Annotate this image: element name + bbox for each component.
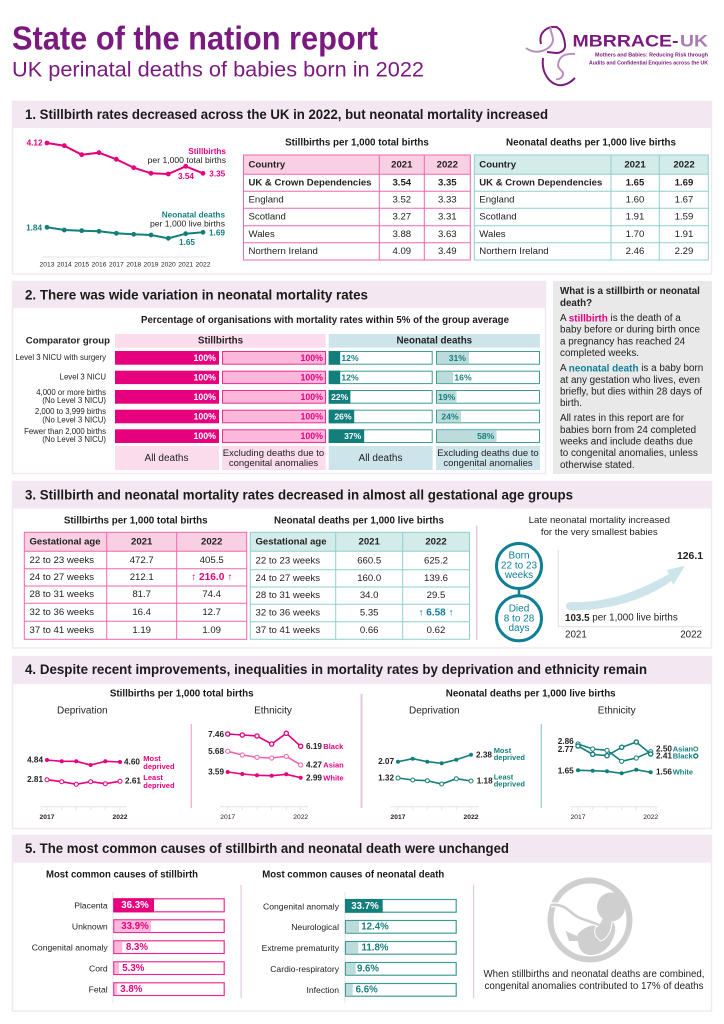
table: stillbirths by gestational age: 2022: [201, 536, 222, 548]
bar chart: causes of neonatal death: Congenital anomaly: [263, 902, 340, 912]
bar chart: stillbirths: 100%: [194, 353, 216, 363]
line chart: stillbirths by ethnicity: Ethnicity: [254, 706, 292, 716]
line chart: UK rates 2013 to 2022: 2020: [161, 262, 176, 268]
table: neonatal deaths by country: 2021: [624, 160, 646, 170]
bar chart: causes of neonatal death: 9.6%: [357, 964, 379, 974]
table: neonatal deaths by gestational age: 625.2: [424, 556, 448, 566]
line chart: neonatal deaths by deprivation: Least: [494, 772, 514, 782]
bar chart: neonatal deaths: 31%: [449, 353, 466, 363]
table: stillbirths by country: 3.27: [392, 212, 411, 222]
bar chart: causes of neonatal death: Infection: [306, 985, 339, 995]
subheading: neonatal deaths: Neonatal deaths per 1,000 live births: [446, 688, 616, 700]
table: neonatal deaths by gestational age: 24 to 27 weeks: [256, 573, 320, 584]
line chart: neonatal deaths by ethnicity: Asian: [673, 744, 694, 754]
line chart: neonatal deaths by deprivation: Most: [494, 746, 512, 755]
bar chart: stillbirths: congenital anomalies: [229, 458, 318, 469]
line chart: neonatal deaths by deprivation: 2022: [464, 814, 479, 821]
bar chart: causes of stillbirth: 8.3%: [126, 942, 148, 953]
row labels: comparator group: Level 3 NICU: [60, 372, 106, 382]
callout: late neonatal mortality: 103.5 per 1,000 live births: [565, 612, 678, 624]
callout: late neonatal mortality: 8 to 28: [504, 614, 535, 624]
callout: late neonatal mortality: days: [508, 623, 530, 634]
table: neonatal deaths by country: 1.67: [675, 194, 693, 206]
line chart: neonatal deaths by deprivation: deprived: [494, 780, 525, 788]
table: stillbirths by gestational age: 212.1: [130, 572, 154, 583]
bar chart: causes of neonatal death: Most common causes of neonatal death: [262, 870, 444, 880]
bar chart: neonatal deaths: 58%: [477, 431, 495, 441]
table: neonatal deaths by country: 2022: [673, 160, 695, 170]
table: stillbirths by gestational age: ↑ 216.0 ↑: [191, 572, 232, 583]
line chart: UK rates 2013 to 2022: per 1,000 total births: [148, 155, 226, 165]
line chart: neonatal deaths by deprivation: 1.18: [477, 776, 493, 786]
table heading: neonatal deaths by country: Neonatal deaths per 1,000 live births: [506, 138, 676, 148]
title: UK perinatal deaths of babies born in 2022: [12, 58, 424, 82]
line chart: stillbirths by ethnicity: 4.27: [306, 760, 322, 770]
bar chart: neonatal deaths: 26%: [334, 412, 352, 422]
table: stillbirths by gestational age: 22 to 23 weeks: [30, 555, 94, 566]
bar chart: causes of stillbirth: 36.3%: [121, 900, 149, 911]
subheading: stillbirths: Stillbirths per 1,000 total births: [110, 688, 254, 700]
panel: section 4: [12, 656, 712, 828]
table: neonatal deaths by gestational age: Gestational age: [256, 536, 326, 548]
line chart: stillbirths by deprivation: deprived: [143, 762, 175, 771]
line chart: UK rates 2013 to 2022: 2018: [126, 262, 141, 268]
logo: MBRRACE-UK: MBRRACE-: [572, 33, 678, 51]
table: stillbirths by gestational age: 37 to 41 weeks: [30, 625, 94, 636]
table: stillbirths by gestational age: 32 to 36 weeks: [30, 607, 94, 618]
table: stillbirths by country: UK & Crown Dependencies: [248, 178, 372, 188]
table: stillbirths by country: 2021: [391, 160, 413, 170]
bar chart: causes of stillbirth: [32, 870, 224, 1003]
line chart: stillbirths by deprivation: Deprivation: [57, 706, 108, 716]
callout: late neonatal mortality: Late neonatal mortality increased: [529, 515, 670, 526]
line chart: UK rates 2013 to 2022: 2022: [196, 262, 211, 268]
line chart: UK rates 2013 to 2022: 1.65: [179, 238, 195, 247]
bar chart: causes of stillbirth: 33.9%: [121, 921, 149, 932]
table: stillbirths by country: Scotland: [248, 212, 286, 222]
bar chart: causes of neonatal death: Neurological: [291, 922, 339, 932]
bar chart: stillbirths: All deaths: [145, 453, 188, 464]
table: neonatal deaths by gestational age: 2022: [425, 536, 447, 548]
text: congenital anomalies callout: When stillbirths and neonatal deaths are combined,: [484, 969, 704, 980]
line chart: neonatal deaths by ethnicity: White: [673, 768, 693, 776]
panel: what is a stillbirth or neonatal death: birth.: [560, 398, 582, 409]
callout: late neonatal mortality: 22 to 23: [501, 560, 538, 572]
line chart: neonatal deaths by deprivation: 2.38: [476, 750, 492, 760]
row labels: comparator group: (No Level 3 NICU): [42, 416, 106, 424]
table: neonatal deaths by gestational age: 29.5: [427, 590, 445, 601]
line chart: stillbirths by ethnicity: 2.99: [306, 774, 322, 782]
table: neonatal deaths by country: 1.91: [675, 229, 693, 240]
table: stillbirths by gestational age: 2021: [131, 536, 153, 548]
table: stillbirths by country: Wales: [248, 229, 275, 240]
bar chart: neonatal deaths: 16%: [454, 372, 472, 382]
row labels: comparator group: (No Level 3 NICU): [42, 396, 106, 405]
table: neonatal deaths by gestational age: 2021: [359, 536, 381, 548]
row labels: comparator group: Comparator group: [26, 336, 110, 346]
heading: section 4: 4. Despite recent improvements, inequalities in mortality rates by deprivation and ethnicity remain: [25, 662, 647, 677]
panel: what is a stillbirth or neonatal death: babies born from 24 completed: [560, 425, 696, 436]
line chart: UK rates 2013 to 2022: 1.84: [26, 224, 42, 232]
table: neonatal deaths by country: 2.46: [626, 246, 644, 257]
panel: what is a stillbirth or neonatal death: a pregnancy has reached 24: [560, 336, 686, 348]
panel: what is a stillbirth or neonatal death: A neonatal death is a baby born: [560, 363, 703, 374]
bar chart: causes of stillbirth: 5.3%: [122, 963, 145, 974]
line chart: UK rates 2013 to 2022: 2015: [74, 262, 89, 268]
bar chart: neonatal deaths: 19%: [438, 392, 456, 402]
panel: what is a stillbirth or neonatal death: briefly, but dies within 28 days of: [560, 386, 702, 398]
line chart: neonatal deaths by ethnicity: 2.41: [656, 752, 672, 760]
bar chart: stillbirths: 100%: [300, 372, 323, 382]
bar chart: causes of neonatal death: 12.4%: [361, 922, 389, 932]
table: neonatal deaths by gestational age: [250, 532, 470, 639]
bar chart: stillbirths: 100%: [300, 412, 323, 422]
panel: section 1: [12, 101, 712, 274]
table: neonatal deaths by gestational age: 37 to 41 weeks: [256, 625, 320, 636]
heading: section 2: 2. There was wide variation in neonatal mortality rates: [25, 288, 368, 302]
bar chart: stillbirths: Excluding deaths due to: [223, 448, 324, 459]
bar chart: stillbirths: [115, 334, 326, 470]
bar chart: causes of stillbirth: Fetal: [89, 984, 108, 994]
bar chart: causes of neonatal death: 33.7%: [351, 901, 379, 912]
text: congenital anomalies callout: congenital anomalies contributed to 17% of deaths: [484, 981, 704, 992]
bar chart: stillbirths: 100%: [194, 372, 216, 382]
line chart: UK rates 2013 to 2022: 1.69: [209, 228, 225, 238]
table: neonatal deaths by gestational age: 28 to 31 weeks: [256, 590, 320, 601]
bar chart: causes of neonatal death: Extreme prematurity: [262, 943, 340, 953]
title: [12, 20, 424, 82]
table: stillbirths by country: Country: [248, 160, 286, 170]
table: stillbirths by country: 3.35: [438, 178, 457, 188]
bar chart: stillbirths: 100%: [300, 353, 323, 363]
panel: what is a stillbirth or neonatal death: death?: [560, 298, 592, 309]
table: neonatal deaths by gestational age: 139.6: [424, 573, 448, 584]
table: stillbirths by gestational age: 472.7: [130, 555, 154, 566]
line chart: neonatal deaths by ethnicity: 1.56: [656, 768, 672, 776]
line chart: UK rates 2013 to 2022: 3.54: [178, 172, 194, 181]
table: stillbirths by gestational age: 24 to 27 weeks: [30, 572, 94, 583]
table: stillbirths by gestational age: Gestational age: [30, 536, 100, 548]
logo: MBRRACE-UK: UK: [680, 33, 708, 51]
panel: what is a stillbirth or neonatal death: A stillbirth is the death of a: [560, 313, 681, 324]
table: neonatal deaths by gestational age: 5.35: [360, 608, 379, 618]
line chart: stillbirths by ethnicity: 7.46: [208, 730, 224, 739]
panel: what is a stillbirth or neonatal death: otherwise stated.: [560, 460, 635, 471]
table: neonatal deaths by country: 1.60: [626, 194, 644, 206]
panel: section 5: [12, 835, 712, 1011]
table: neonatal deaths by country: Wales: [479, 229, 506, 240]
panel: what is a stillbirth or neonatal death: to congenital anomalies, unless: [560, 448, 698, 459]
callout: late neonatal mortality: [496, 515, 703, 641]
heading: section 1: 1. Stillbirth rates decreased across the UK in 2022, but neonatal mortality increased: [25, 107, 548, 122]
bar chart: causes of neonatal death: [262, 870, 456, 1003]
table: neonatal deaths by gestational age: 0.62: [427, 625, 445, 636]
bar chart: causes of neonatal death: 11.8%: [362, 942, 389, 954]
table: stillbirths by country: Northern Ireland: [248, 246, 318, 257]
table: neonatal deaths by gestational age: ↑ 6.58 ↑: [418, 608, 454, 618]
bar chart: neonatal deaths: 12%: [341, 353, 359, 363]
table heading: stillbirths by gestation: Stillbirths per 1,000 total births: [64, 516, 208, 526]
row labels: comparator group: Level 3 NICU with surgery: [15, 353, 106, 362]
table: stillbirths by gestational age: 81.7: [132, 589, 151, 600]
table: stillbirths by country: 3.33: [438, 194, 457, 206]
table heading: stillbirths by country: Stillbirths per 1,000 total births: [285, 138, 429, 148]
line chart: neonatal deaths by ethnicity: Black: [673, 752, 694, 760]
table: stillbirths by country: 3.49: [438, 246, 457, 257]
line chart: stillbirths by ethnicity: Black: [323, 742, 344, 751]
table: neonatal deaths by country: 1.59: [675, 212, 693, 222]
line chart: neonatal deaths by deprivation: 2017: [391, 814, 406, 821]
bar chart: causes of stillbirth: Cord: [89, 964, 108, 974]
bar chart: stillbirths: 100%: [300, 392, 323, 402]
panel: what is a stillbirth or neonatal death: weeks and include deaths due: [559, 436, 693, 448]
table: stillbirths by country: [244, 155, 470, 260]
line chart: stillbirths by deprivation: 4.60: [124, 758, 140, 766]
callout: late neonatal mortality: weeks: [504, 570, 533, 581]
bar chart: causes of stillbirth: Congenital anomaly: [32, 942, 108, 952]
table: stillbirths by gestational age: 28 to 31 weeks: [30, 589, 94, 600]
row labels: comparator group: (No Level 3 NICU): [42, 435, 106, 444]
bar chart: stillbirths: Stillbirths: [198, 336, 244, 346]
line chart: stillbirths by ethnicity: 2022: [293, 814, 308, 821]
table: neonatal deaths by gestational age: 0.66: [360, 625, 379, 636]
bar chart: neonatal deaths: congenital anomalies: [443, 458, 533, 469]
line chart: stillbirths by deprivation: deprived: [143, 781, 175, 790]
logo: MBRRACE-UK: [526, 27, 708, 85]
line chart: stillbirths by deprivation: Least: [143, 773, 163, 782]
panel: what is a stillbirth or neonatal death: What is a stillbirth or neonatal: [560, 286, 700, 297]
icon: baby in womb: [550, 880, 630, 960]
line chart: neonatal deaths by ethnicity: 1.65: [558, 766, 574, 776]
line chart: stillbirths by ethnicity: 6.19: [306, 742, 322, 751]
line chart: UK rates 2013 to 2022: 2016: [92, 262, 107, 268]
table: stillbirths by country: 4.09: [392, 246, 411, 257]
bar chart: causes of stillbirth: 3.8%: [120, 984, 143, 995]
panel: section 2: [12, 281, 546, 474]
bar chart: causes of neonatal death: 6.6%: [356, 984, 378, 996]
table: neonatal deaths by gestational age: 22 to 23 weeks: [256, 556, 320, 566]
callout: late neonatal mortality: Born: [508, 550, 530, 562]
bar chart: neonatal deaths: Excluding deaths due to: [437, 448, 539, 459]
line chart: UK rates 2013 to 2022: 2019: [144, 262, 159, 268]
callout: late neonatal mortality: 126.1: [677, 551, 703, 562]
line chart: neonatal deaths by ethnicity: 2.86: [558, 737, 574, 746]
panel: section 3: [12, 481, 712, 648]
line chart: neonatal deaths by deprivation: 2.07: [378, 757, 394, 766]
table: neonatal deaths by gestational age: 32 to 36 weeks: [256, 608, 320, 618]
line chart: neonatal deaths by deprivation: deprived: [494, 753, 525, 762]
line chart: stillbirths by ethnicity: [208, 706, 344, 821]
panel: what is a stillbirth or neonatal death: All rates in this report are for: [560, 413, 685, 424]
table: stillbirths by gestational age: 1.19: [132, 625, 151, 636]
bar chart: neonatal deaths: 24%: [441, 412, 459, 422]
line chart: UK rates 2013 to 2022: [26, 138, 226, 268]
line chart: UK rates 2013 to 2022: 2017: [109, 262, 124, 268]
bar chart: neonatal deaths: 12%: [341, 372, 359, 382]
table: stillbirths by country: 3.88: [392, 229, 411, 240]
bar chart: neonatal deaths: All deaths: [359, 453, 402, 464]
line chart: stillbirths by deprivation: 2022: [113, 814, 128, 821]
heading: section 5: 5. The most common causes of stillbirth and neonatal death were unchanged: [25, 841, 509, 856]
line chart: stillbirths by ethnicity: 5.68: [208, 747, 224, 756]
row labels: comparator group: 2,000 to 3,999 births: [35, 407, 106, 416]
table: neonatal deaths by country: 1.91: [626, 212, 644, 222]
line chart: UK rates 2013 to 2022: 2014: [57, 262, 72, 268]
panel: what is a stillbirth or neonatal death: at any gestation who lives, even: [560, 375, 700, 386]
line chart: UK rates 2013 to 2022: 2021: [178, 262, 193, 268]
callout: late neonatal mortality: 2022: [680, 630, 702, 640]
title: State of the nation report: [12, 20, 378, 58]
line chart: UK rates 2013 to 2022: per 1,000 live births: [150, 218, 225, 228]
table: neonatal deaths by country: 1.65: [626, 178, 645, 188]
table: stillbirths by country: England: [248, 194, 284, 206]
bar chart: neonatal deaths: 22%: [331, 392, 349, 402]
table: neonatal deaths by gestational age: 34.0: [360, 590, 379, 601]
table: stillbirths by gestational age: [24, 532, 247, 639]
table: stillbirths by gestational age: 16.4: [132, 607, 152, 618]
line chart: stillbirths by deprivation: Most: [143, 754, 161, 763]
logo: MBRRACE-UK: Audits and Confidential Enquiries across the UK: [589, 60, 708, 66]
line chart: neonatal deaths by deprivation: 1.32: [378, 774, 394, 782]
arrow: rising rate: [566, 566, 685, 610]
line chart: stillbirths by ethnicity: 3.59: [208, 768, 224, 776]
table heading: neonatal deaths by gestation: Neonatal deaths per 1,000 live births: [274, 516, 444, 526]
panel: what is a stillbirth or neonatal death: [553, 281, 712, 474]
text: congenital anomalies callout: [484, 969, 704, 992]
bar chart: stillbirths: 100%: [194, 431, 216, 441]
bar chart: causes of stillbirth: Most common causes of stillbirth: [46, 870, 198, 880]
bar chart: neonatal deaths: Neonatal deaths: [396, 336, 473, 346]
line chart: neonatal deaths by ethnicity: [558, 706, 698, 821]
table: neonatal deaths by country: Country: [479, 160, 517, 170]
table: neonatal deaths by country: UK & Crown Dependencies: [479, 178, 602, 188]
line chart: UK rates 2013 to 2022: 3.35: [209, 170, 226, 178]
line chart: stillbirths by deprivation: 2.61: [125, 776, 141, 786]
table: stillbirths by country: 3.63: [438, 229, 457, 240]
line chart: neonatal deaths by deprivation: Deprivation: [409, 706, 460, 716]
logo: MBRRACE-UK: Mothers and Babies: Reducing Risk through: [595, 53, 708, 59]
line chart: stillbirths by deprivation: 2.81: [27, 775, 43, 784]
line chart: neonatal deaths by ethnicity: 2022: [643, 814, 658, 821]
table: neonatal deaths by gestational age: 160.0: [357, 573, 381, 584]
line chart: neonatal deaths by ethnicity: Ethnicity: [598, 706, 636, 716]
callout: late neonatal mortality: Died: [509, 604, 529, 614]
callout: late neonatal mortality: 2021: [565, 630, 587, 640]
bar chart: neonatal deaths: 37%: [344, 431, 362, 441]
row labels: comparator group: 4,000 or more births: [36, 388, 106, 397]
line chart: neonatal deaths by ethnicity: 2017: [571, 814, 586, 821]
line chart: UK rates 2013 to 2022: Neonatal deaths: [162, 210, 225, 220]
table: stillbirths by gestational age: 1.09: [202, 625, 221, 636]
row labels: comparator group: Fewer than 2,000 births: [24, 427, 106, 436]
subheading: percentage of organisations: Percentage of organisations with mortality rates within 5% of the group average: [141, 315, 510, 326]
panel: what is a stillbirth or neonatal death: completed weeks.: [560, 348, 639, 359]
line chart: neonatal deaths by deprivation: [378, 706, 525, 821]
panel: what is a stillbirth or neonatal death: baby before or during birth once: [560, 324, 700, 336]
row labels: comparator group: [15, 336, 110, 444]
line chart: stillbirths by ethnicity: Asian: [323, 760, 344, 770]
bar chart: causes of stillbirth: Placenta: [74, 900, 108, 910]
bar chart: neonatal deaths: [329, 334, 540, 470]
bar chart: causes of stillbirth: Unknown: [72, 922, 108, 932]
table: neonatal deaths by gestational age: 660.5: [357, 556, 381, 566]
heading: section 3: 3. Stillbirth and neonatal mortality rates decreased in almost all gestational age groups: [25, 488, 573, 502]
table: stillbirths by country: 3.31: [438, 212, 457, 222]
table: neonatal deaths by country: England: [479, 194, 515, 206]
line chart: stillbirths by deprivation: 4.84: [27, 756, 43, 764]
line chart: stillbirths by deprivation: [27, 706, 175, 821]
bar chart: stillbirths: 100%: [194, 392, 216, 402]
line chart: UK rates 2013 to 2022: 2013: [40, 262, 55, 268]
table: stillbirths by country: 2022: [437, 160, 458, 170]
line chart: UK rates 2013 to 2022: 4.12: [27, 138, 43, 148]
table: stillbirths by country: 3.52: [392, 194, 411, 206]
bar chart: causes of neonatal death: Cardio-respiratory: [270, 964, 340, 974]
table: stillbirths by gestational age: 12.7: [202, 607, 221, 618]
line chart: neonatal deaths by ethnicity: 2.50: [656, 744, 672, 754]
table: neonatal deaths by country: [474, 155, 708, 260]
table: neonatal deaths by country: 1.69: [675, 178, 693, 188]
table: neonatal deaths by country: 1.70: [626, 229, 644, 240]
line chart: UK rates 2013 to 2022: Stillbirths: [188, 147, 226, 156]
table: stillbirths by gestational age: 74.4: [202, 589, 222, 600]
table: neonatal deaths by country: Northern Ireland: [479, 246, 549, 257]
line chart: stillbirths by ethnicity: 2017: [220, 814, 235, 821]
table: neonatal deaths by country: Scotland: [479, 212, 517, 222]
table: stillbirths by gestational age: 405.5: [200, 555, 224, 566]
bar chart: stillbirths: 100%: [194, 412, 216, 422]
line chart: neonatal deaths by ethnicity: 2.77: [558, 745, 574, 754]
bar chart: stillbirths: 100%: [300, 431, 323, 441]
table: neonatal deaths by country: 2.29: [675, 246, 693, 257]
line chart: stillbirths by deprivation: 2017: [40, 814, 55, 821]
line chart: stillbirths by ethnicity: White: [323, 774, 344, 782]
callout: late neonatal mortality: for the very smallest babies: [541, 527, 658, 538]
table: stillbirths by country: 3.54: [392, 178, 412, 188]
